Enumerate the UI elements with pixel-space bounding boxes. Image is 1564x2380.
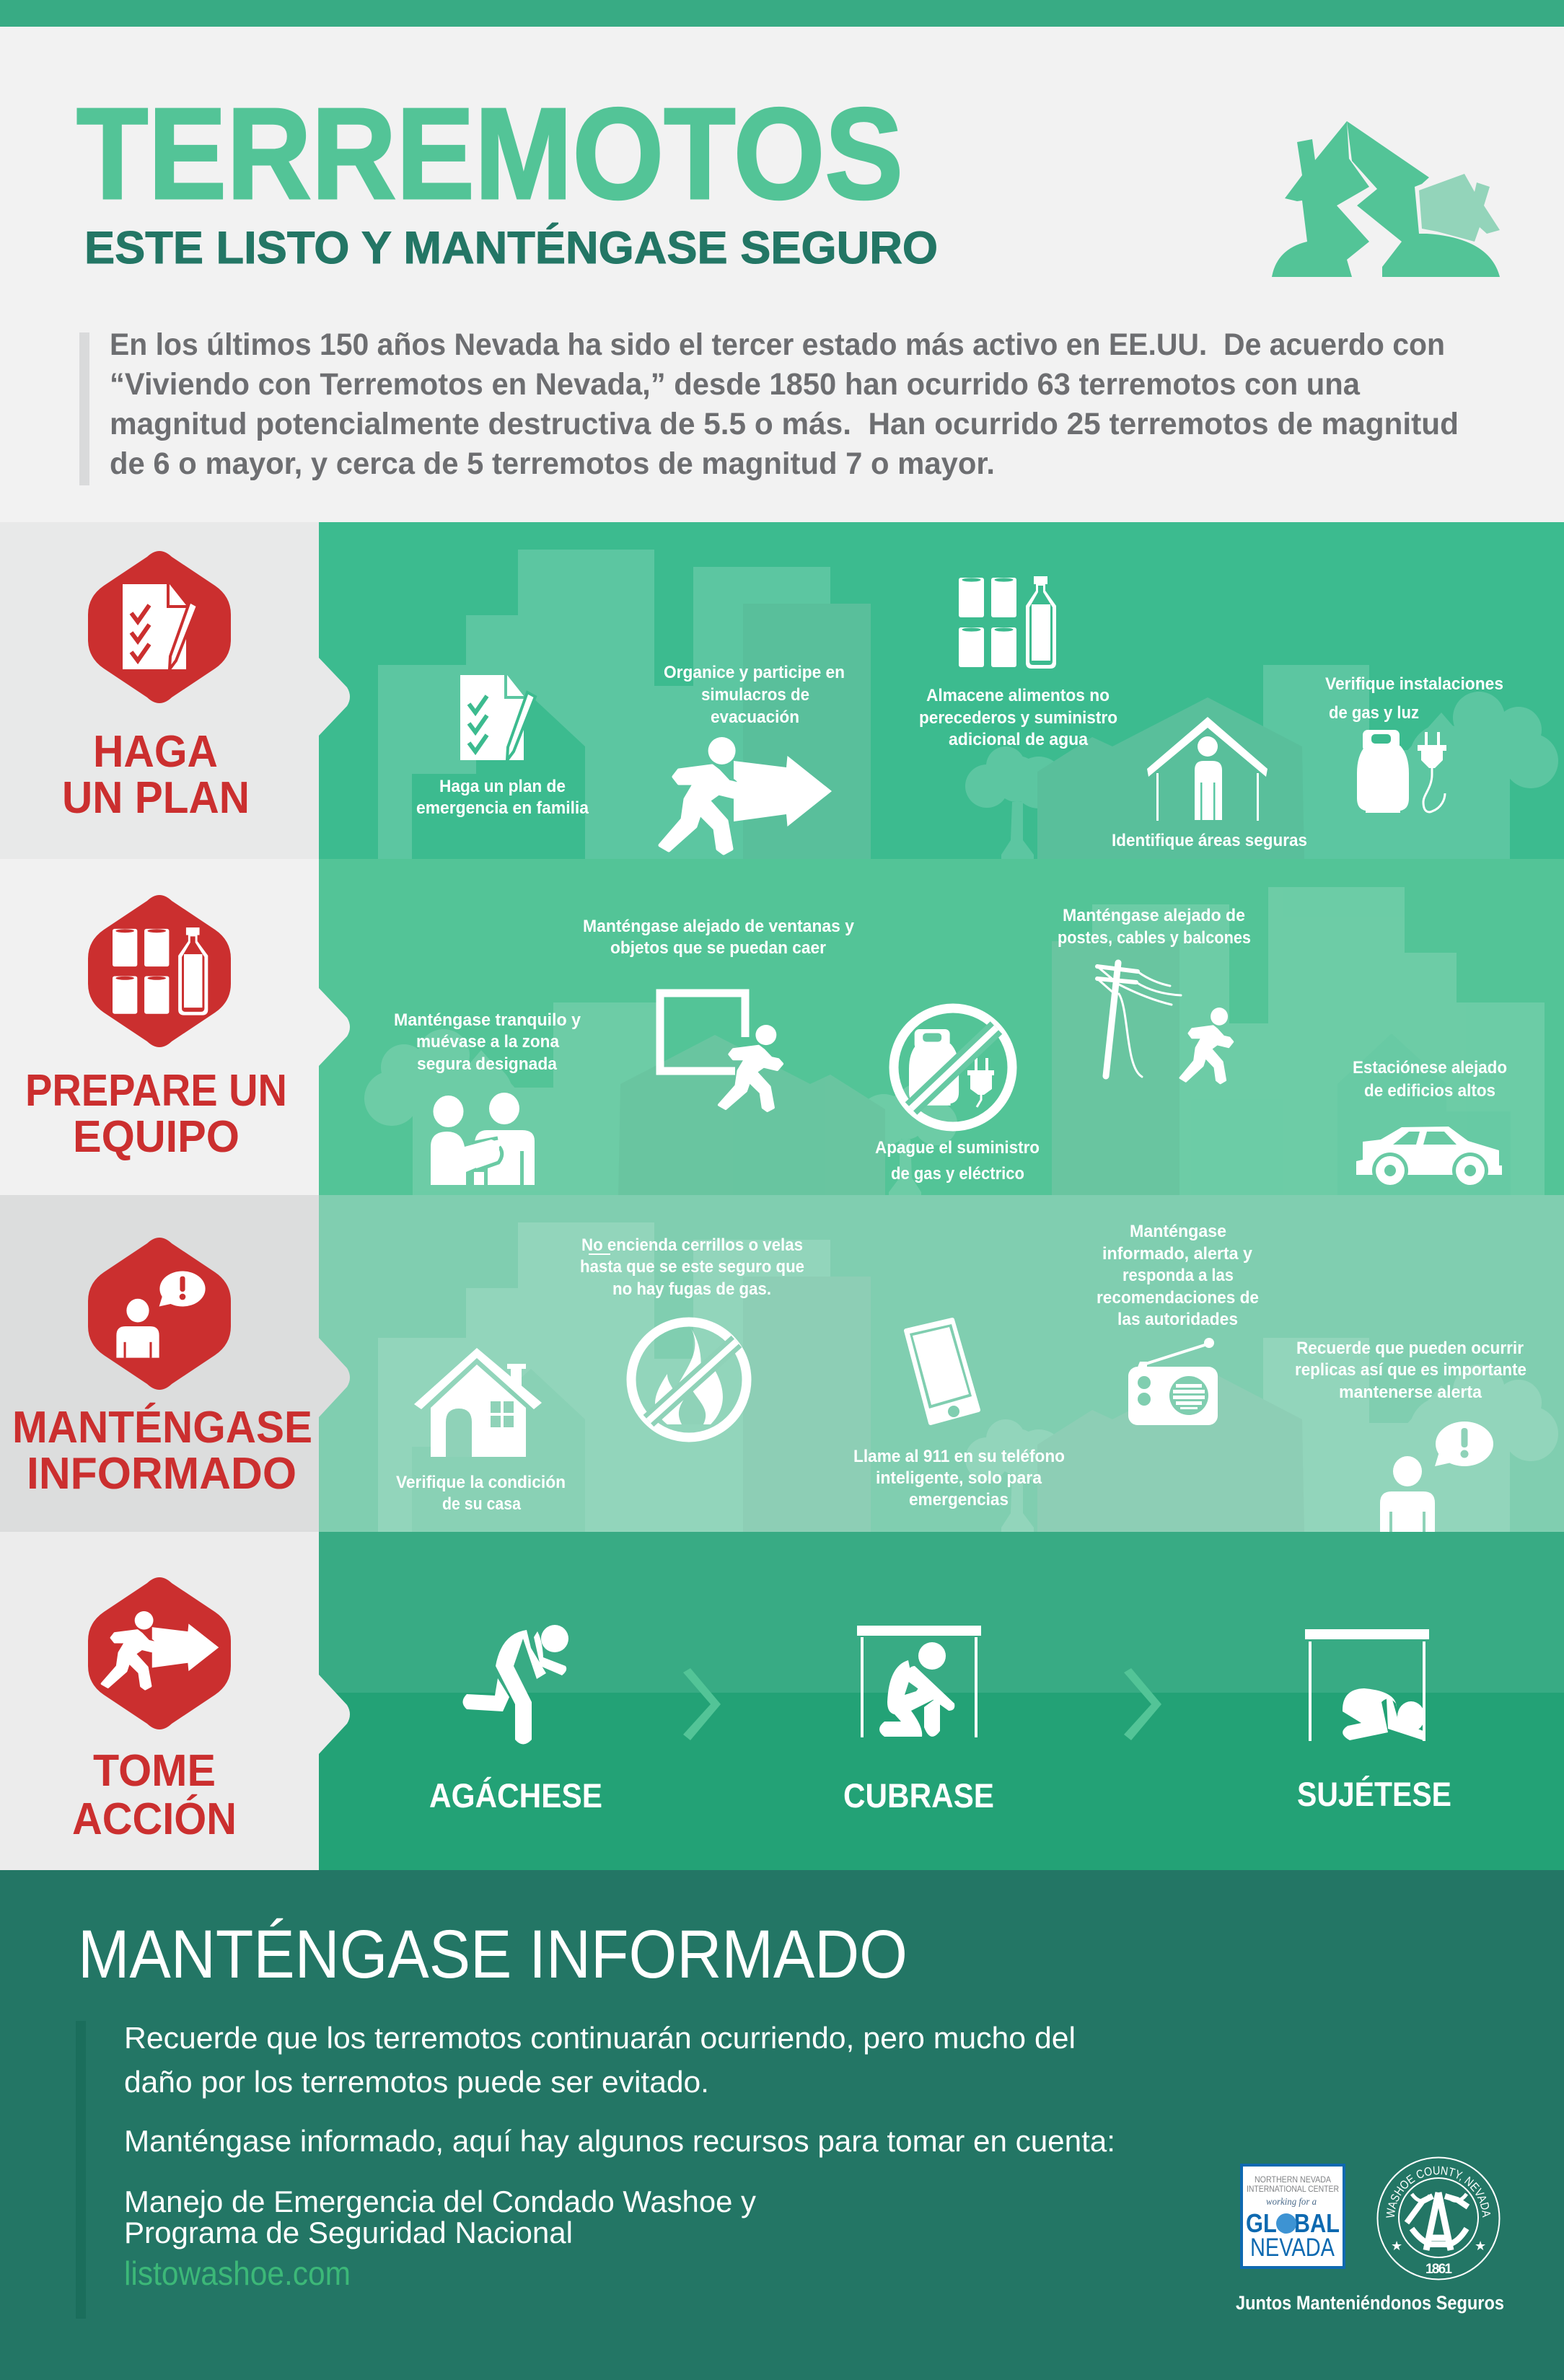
heading: tome acción: TOME bbox=[93, 1746, 216, 1796]
icon: no flame bbox=[631, 1322, 747, 1437]
footer text block: Manténgase informado, aquí hay algunos recursos para tomar en cuenta: bbox=[124, 2124, 1115, 2158]
label: drills: simulacros de bbox=[701, 685, 809, 705]
icon: house bbox=[414, 1348, 542, 1457]
intro text block: de 6 o mayor, y cerca de 5 terremotos de magnitud 7 o mayor. bbox=[110, 446, 995, 481]
intro text block bbox=[79, 327, 1459, 485]
label: aftershocks: replicas así que es importante bbox=[1295, 1360, 1526, 1380]
badge: plan bbox=[88, 551, 231, 703]
label: family plan: emergencia en familia bbox=[416, 798, 589, 818]
label: check house bbox=[396, 1473, 566, 1514]
heading: haga un plan: UN PLAN bbox=[62, 773, 250, 823]
label: stay calm: muévase a la zona bbox=[416, 1032, 560, 1052]
label: check house: de su casa bbox=[442, 1494, 522, 1514]
arrow: step two bbox=[1124, 1668, 1161, 1740]
label: call 911: Llame al 911 en su teléfono bbox=[853, 1447, 1065, 1466]
label: tall buildings bbox=[1353, 1058, 1507, 1101]
top bar bbox=[0, 0, 1564, 27]
label: poles: postes, cables y balcones bbox=[1058, 928, 1251, 948]
label: cubrase: CUBRASE bbox=[843, 1776, 994, 1815]
icon: person in safe house bbox=[1147, 717, 1268, 821]
label: drills: Organice y participe en bbox=[664, 663, 845, 682]
label: tall buildings: de edificios altos bbox=[1364, 1081, 1495, 1101]
heading: prepare un equipo: PREPARE UN bbox=[25, 1066, 287, 1116]
label: family plan bbox=[416, 777, 589, 818]
label: food storage: Almacene alimentos no bbox=[926, 686, 1110, 705]
label: turn off bbox=[875, 1138, 1040, 1184]
footer text block bbox=[76, 2021, 1115, 2319]
label: food storage: adicional de agua bbox=[949, 730, 1089, 749]
label: poles bbox=[1058, 906, 1251, 948]
label: windows: Manténgase alejado de ventanas y bbox=[583, 917, 855, 936]
logo: washoe county seal: 1861 bbox=[1425, 2262, 1452, 2277]
icon: two people bbox=[431, 1093, 535, 1185]
logo: global nevada: NORTHERN NEVADA bbox=[1255, 2174, 1331, 2185]
icon: smartphone bbox=[906, 1320, 978, 1423]
label: authorities: las autoridades bbox=[1117, 1310, 1238, 1329]
label: no matches: No encienda cerrillos o velas bbox=[581, 1235, 803, 1255]
badge: kit bbox=[88, 895, 231, 1047]
label: aftershocks: Recuerde que pueden ocurrir bbox=[1296, 1339, 1524, 1358]
icon: window and walker bbox=[660, 993, 782, 1111]
intro text block: En los últimos 150 años Nevada ha sido el tercer estado más activo en EE.UU. De acuerdo con bbox=[110, 327, 1445, 362]
icon: cover figure bbox=[857, 1626, 981, 1737]
icon: checklist bbox=[460, 675, 535, 760]
heading: haga un plan: HAGA bbox=[93, 727, 218, 777]
title: TERREMOTOS bbox=[76, 81, 903, 226]
label: turn off: Apague el suministro bbox=[875, 1138, 1040, 1158]
label: windows bbox=[583, 917, 855, 958]
logo: washoe county seal: WASHOE COUNTY, NEVADA bbox=[1386, 2167, 1490, 2218]
footer text block: listowashoe.com bbox=[124, 2255, 351, 2292]
label: turn off: de gas y eléctrico bbox=[891, 1164, 1024, 1184]
label: authorities: responda a las bbox=[1123, 1266, 1234, 1285]
intro text block: magnitud potencialmente destructiva de 5.5 o más. Han ocurrido 25 terremotos de magnitud bbox=[110, 407, 1459, 441]
label: aftershocks bbox=[1295, 1339, 1526, 1402]
icon: person with alert bubble bbox=[1380, 1422, 1493, 1532]
label: stay calm bbox=[394, 1010, 581, 1074]
heading: tome acción bbox=[72, 1746, 237, 1844]
label: stay calm: Manténgase tranquilo y bbox=[394, 1010, 581, 1030]
label: no matches: hasta que se este seguro que bbox=[580, 1257, 804, 1277]
logo: washoe county seal: ★ bbox=[1391, 2239, 1402, 2253]
label: windows: objetos que se puedan caer bbox=[610, 938, 826, 958]
heading: tome acción: ACCIÓN bbox=[72, 1794, 237, 1844]
icon: cracked house bbox=[1272, 121, 1500, 277]
footer heading: MANTÉNGASE INFORMADO bbox=[78, 1916, 908, 1993]
label: agáchese: AGÁCHESE bbox=[429, 1776, 602, 1815]
label: gas and power: Verifique instalaciones bbox=[1325, 674, 1503, 694]
label: gas and power bbox=[1325, 674, 1503, 723]
label: authorities: informado, alerta y bbox=[1102, 1244, 1253, 1264]
logo: global nevada: INTERNATIONAL CENTER bbox=[1247, 2184, 1339, 2194]
heading: manténgase informado: MANTÉNGASE bbox=[12, 1403, 312, 1453]
label: authorities: recomendaciones de bbox=[1097, 1288, 1259, 1308]
logo: washoe county seal bbox=[1376, 2156, 1501, 2280]
label: drills: evacuación bbox=[711, 708, 799, 727]
label: safe areas: Identifique áreas seguras bbox=[1112, 831, 1307, 850]
icon: drop figure bbox=[463, 1625, 568, 1744]
label: drills bbox=[664, 663, 845, 727]
label: poles: Manténgase alejado de bbox=[1063, 906, 1245, 925]
footer text block: daño por los terremotos puede ser evitado. bbox=[124, 2065, 709, 2099]
icon: gas cylinder and plug bbox=[1357, 730, 1446, 813]
label: call 911 bbox=[853, 1447, 1065, 1509]
panel: tome acción bbox=[0, 1532, 1564, 1870]
label: stay calm: segura designada bbox=[417, 1054, 558, 1074]
label: aftershocks: mantenerse alerta bbox=[1339, 1383, 1482, 1402]
heading: prepare un equipo bbox=[25, 1066, 287, 1162]
logo: washoe county seal: ★ bbox=[1475, 2239, 1486, 2253]
icon: walker bbox=[1180, 1008, 1233, 1083]
label: authorities bbox=[1097, 1222, 1259, 1329]
label: check house: Verifique la condición bbox=[396, 1473, 566, 1492]
footer text block: Recuerde que los terremotos continuarán ocurriendo, pero mucho del bbox=[124, 2021, 1076, 2055]
icon: radio bbox=[1128, 1338, 1218, 1425]
heading: haga un plan bbox=[62, 727, 250, 823]
logo: global nevada: NEVADA bbox=[1250, 2234, 1335, 2262]
heading: manténgase informado: INFORMADO bbox=[27, 1449, 296, 1499]
label: food storage bbox=[919, 686, 1117, 749]
intro text block: “Viviendo con Terremotos en Nevada,” desde 1850 han ocurrido 63 terremotos con una bbox=[110, 367, 1361, 402]
logo: global nevada: working for a bbox=[1266, 2197, 1317, 2208]
tagline: Juntos Manteniéndonos Seguros bbox=[1236, 2292, 1504, 2314]
arrow: step one bbox=[683, 1668, 721, 1740]
icon: no gas or electricity bbox=[894, 1008, 1012, 1127]
panel: manténgase informado bbox=[0, 1195, 1564, 1532]
icon: cans and bottle bbox=[959, 576, 1056, 669]
icon: car bbox=[1356, 1127, 1502, 1189]
footer text block: Manejo de Emergencia del Condado Washoe y bbox=[124, 2185, 756, 2218]
label: tall buildings: Estaciónese alejado bbox=[1353, 1058, 1507, 1077]
heading: manténgase informado bbox=[12, 1403, 312, 1499]
label: sujétese: SUJÉTESE bbox=[1297, 1775, 1451, 1813]
subtitle: ESTE LISTO Y MANTÉNGASE SEGURO bbox=[84, 223, 938, 273]
icon: utility pole bbox=[1097, 963, 1181, 1077]
label: food storage: perecederos y suministro bbox=[919, 708, 1117, 728]
icon: runner with arrow bbox=[660, 737, 832, 853]
label: authorities: Manténgase bbox=[1130, 1222, 1226, 1241]
label: call 911: emergencias bbox=[909, 1490, 1009, 1509]
badge: action bbox=[88, 1577, 231, 1729]
label: no matches: no hay fugas de gas. bbox=[612, 1279, 771, 1299]
label: gas and power: de gas y luz bbox=[1329, 703, 1419, 723]
heading: prepare un equipo: EQUIPO bbox=[73, 1112, 240, 1162]
label: no matches bbox=[580, 1235, 804, 1299]
badge: informed bbox=[88, 1238, 231, 1390]
label: call 911: inteligente, solo para bbox=[876, 1468, 1042, 1488]
logo: global nevada: GLOBAL bbox=[1246, 2208, 1340, 2238]
footer text block: Programa de Seguridad Nacional bbox=[124, 2216, 573, 2249]
label: family plan: Haga un plan de bbox=[439, 777, 566, 796]
panel: prepare un equipo bbox=[0, 859, 1564, 1196]
logo: global nevada bbox=[1242, 2165, 1344, 2267]
panel: footer bbox=[0, 1870, 1564, 2380]
icon: hold figure bbox=[1305, 1629, 1429, 1741]
panel: haga un plan bbox=[0, 522, 1564, 859]
